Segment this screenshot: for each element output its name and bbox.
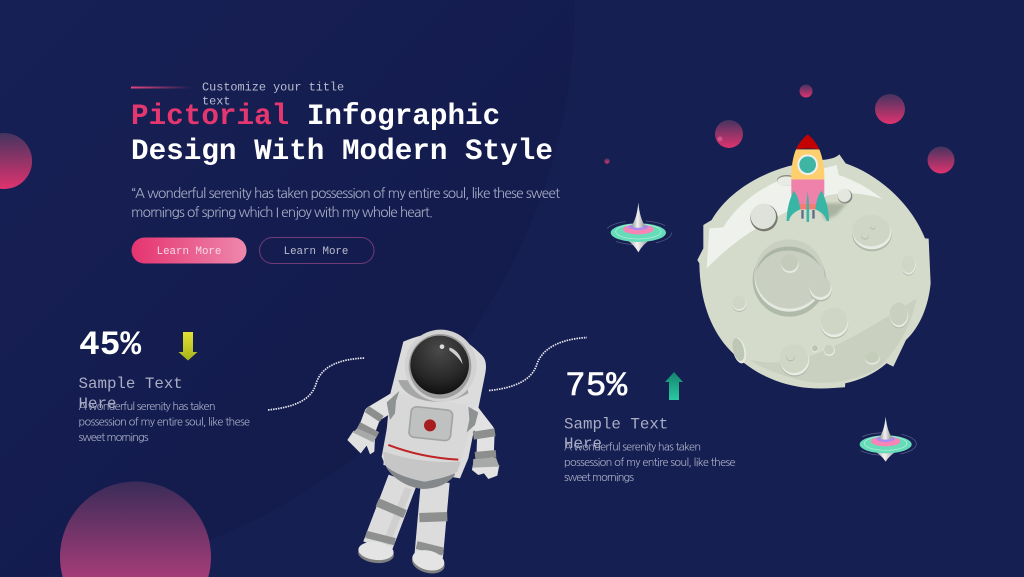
stat text right: sweet mornings bbox=[564, 472, 634, 483]
button: primary: Learn More bbox=[157, 246, 221, 258]
stat text left: possession of my entire soul, like these bbox=[78, 416, 250, 428]
planet: left edge bbox=[0, 133, 32, 189]
dotted connector right bbox=[489, 338, 587, 390]
spinning top: left bbox=[605, 202, 672, 252]
left arm bbox=[347, 401, 395, 454]
stat heading left: Sample Text bbox=[78, 375, 183, 393]
planet: bottom left bbox=[60, 481, 211, 577]
torso bbox=[382, 391, 478, 489]
intro paragraph: “A wonderful serenity has taken possession of my entire soul, like these sweet bbox=[131, 186, 560, 200]
stat text right: A wonderful serenity has taken bbox=[564, 442, 701, 452]
right leg bbox=[410, 482, 447, 577]
stat heading left: Here bbox=[78, 395, 116, 413]
moon lower shade bbox=[750, 298, 917, 383]
moon bbox=[697, 134, 931, 389]
stat heading left bbox=[78, 375, 183, 413]
planet: near rocket bbox=[715, 120, 743, 148]
eyebrow: Customize your title bbox=[202, 80, 344, 94]
button: outline: Learn More bbox=[284, 246, 348, 258]
stat text left: sweet mornings bbox=[78, 432, 149, 443]
rocket shadow bbox=[818, 203, 847, 220]
crater: highlight area bbox=[750, 175, 852, 231]
stat heading right: Sample Text bbox=[564, 416, 668, 434]
stat: 45 percent: 45% bbox=[79, 326, 141, 365]
stat text right bbox=[564, 442, 736, 483]
button: primary bbox=[132, 238, 246, 264]
stat: 75 percent bbox=[565, 367, 683, 406]
moon base bbox=[697, 154, 931, 389]
large dark background circle bbox=[0, 0, 575, 577]
intro paragraph: mornings of spring which I enjoy with my whole heart. bbox=[131, 205, 433, 220]
planet: small top bbox=[800, 84, 812, 98]
stat heading right bbox=[564, 416, 668, 453]
stat heading right: Here bbox=[564, 435, 602, 453]
planet: top right bbox=[875, 94, 905, 124]
title bbox=[131, 100, 553, 168]
astronaut bbox=[347, 330, 499, 577]
stat: 45 percent bbox=[79, 326, 198, 365]
left leg bbox=[357, 480, 408, 565]
planet: right bbox=[928, 146, 954, 174]
title: Pictorial Infographic bbox=[131, 100, 500, 133]
title: Design With Modern Style bbox=[131, 135, 553, 168]
spinning top: right bbox=[855, 417, 916, 462]
eyebrow: text bbox=[202, 94, 230, 108]
button: outline bbox=[260, 238, 374, 264]
backpack bbox=[383, 332, 486, 478]
icon: down arrow bbox=[178, 332, 198, 360]
eyebrow bbox=[131, 80, 344, 108]
planet: tiny bbox=[604, 158, 610, 164]
stat text left bbox=[78, 401, 250, 443]
right arm bbox=[470, 411, 499, 479]
helmet bbox=[398, 330, 477, 402]
craters: small bbox=[730, 215, 916, 377]
intro paragraph bbox=[131, 186, 560, 220]
icon: up arrow bbox=[665, 372, 683, 400]
stat: 75 percent: 75% bbox=[565, 367, 627, 406]
dotted connector left bbox=[268, 358, 365, 410]
stat text left: A wonderful serenity has taken bbox=[78, 401, 216, 412]
stat text right: possession of my entire soul, like these bbox=[564, 457, 736, 468]
rocket bbox=[787, 134, 829, 222]
crater: large bbox=[753, 239, 832, 317]
moon highlight bbox=[707, 165, 883, 268]
